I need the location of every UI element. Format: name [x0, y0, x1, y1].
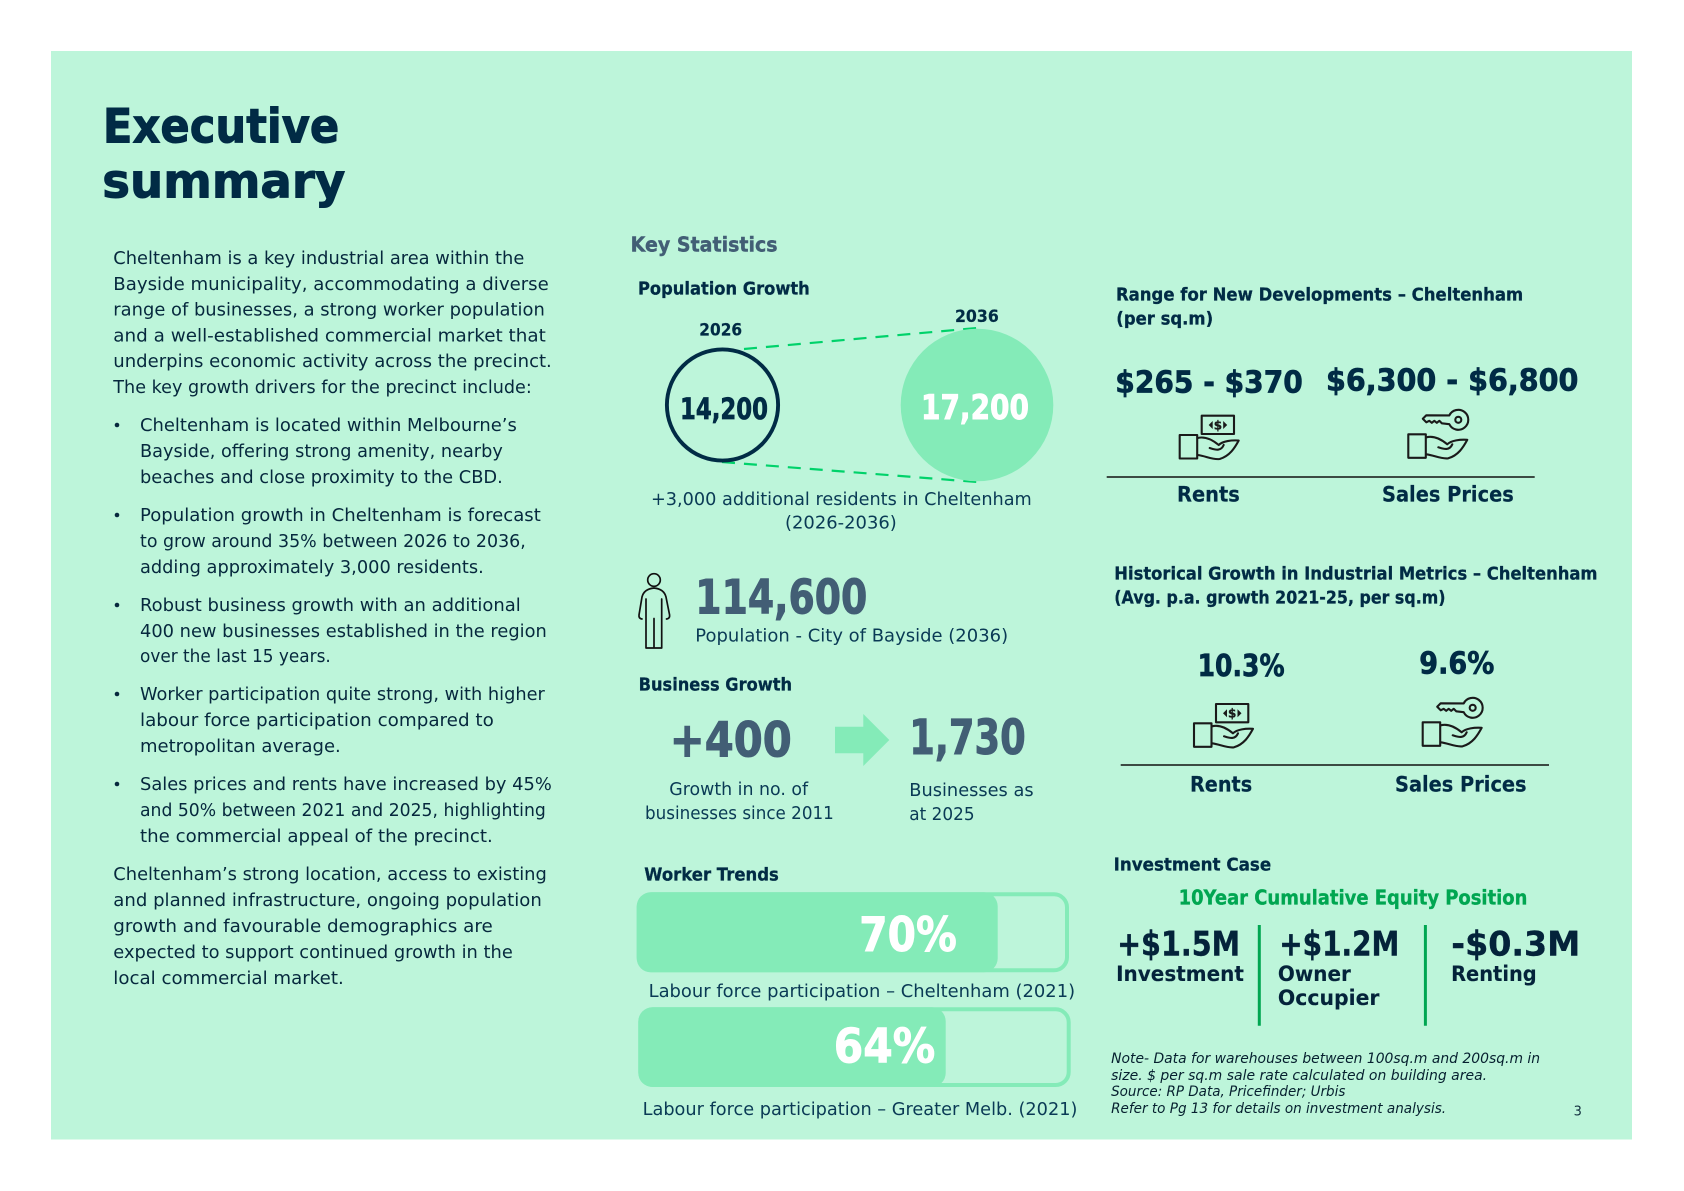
subheading: 10Year Cumulative Equity Position	[1179, 886, 1527, 910]
title	[102, 100, 345, 210]
axis line	[1121, 764, 1549, 766]
intro paragraph: range of businesses, a strong worker population	[113, 300, 545, 320]
closing paragraph	[113, 864, 547, 989]
footnote: Note- Data for warehouses between 100sq.m and 200sq.m in	[1111, 1051, 1540, 1067]
footnote: size. $ per sq.m sale rate calculated on building area.	[1111, 1068, 1487, 1084]
footnote: Refer to Pg 13 for details on investment analysis.	[1111, 1101, 1446, 1117]
icon: hand with money	[1180, 416, 1239, 459]
2036 circle: 2036	[955, 307, 999, 327]
intro paragraph: Cheltenham is a key industrial area within the	[113, 248, 524, 269]
total stat	[909, 710, 1034, 825]
bullet: sales prices and rents: the commercial appeal of the precinct.	[140, 826, 493, 847]
2026 circle: 14,200	[680, 392, 768, 426]
bullet: worker participation: Worker participation quite strong, with higher	[140, 684, 545, 705]
closing paragraph: Cheltenham’s strong location, access to existing	[113, 864, 547, 885]
heading: Range for New Developments – Cheltenham	[1116, 285, 1523, 306]
stat: owner occupier: +$1.2M	[1279, 925, 1399, 965]
bullet: business growth: 400 new businesses established in the region	[140, 621, 547, 642]
closing paragraph: and planned infrastructure, ongoing population	[113, 890, 542, 911]
heading: Worker Trends	[644, 865, 779, 886]
panel: population growth	[638, 279, 1053, 534]
bar: Cheltenham 70%: 70%	[859, 908, 957, 963]
closing paragraph: expected to support continued growth in the	[113, 942, 513, 963]
2036 circle	[901, 307, 1053, 481]
stat: investment: +$1.5M	[1117, 925, 1240, 965]
bullet: population growth: adding approximately 3,000 residents.	[140, 557, 484, 578]
bullet: worker participation: metropolitan average.	[140, 736, 341, 757]
closing paragraph: growth and favourable demographics are	[113, 916, 493, 937]
stat: investment	[1116, 925, 1244, 986]
intro paragraph: The key growth drivers for the precinct include:	[112, 377, 532, 398]
bullet: sales prices and rents: Sales prices and rents have increased by 45%	[140, 774, 552, 795]
growth stat: +400	[670, 712, 792, 768]
heading: (Avg. p.a. growth 2021-25, per sq.m)	[1114, 588, 1445, 609]
population caption	[651, 489, 1032, 534]
icon: hand with money: $	[1214, 418, 1222, 432]
panel: range for new developments	[1107, 285, 1578, 507]
panel: historical growth	[1114, 564, 1598, 797]
growth stat: Growth in no. of	[669, 779, 809, 800]
intro paragraph	[112, 248, 552, 398]
2036 circle: 17,200	[921, 388, 1029, 428]
bullet: population growth: Population growth in Cheltenham is forecast	[140, 505, 541, 526]
bar: Greater Melbourne 64%: Labour force participation – Greater Melb. (2021)	[643, 1099, 1077, 1120]
rents value: $265 - $370	[1115, 365, 1303, 400]
rents label: Rents	[1177, 483, 1240, 507]
sales value: $6,300 - $6,800	[1326, 364, 1578, 399]
sales prices label: Sales Prices	[1395, 773, 1527, 797]
bar: Cheltenham 70%	[637, 892, 1075, 1002]
heading: Investment Case	[1114, 855, 1271, 876]
heading: (per sq.m)	[1116, 309, 1213, 330]
total stat: at 2025	[909, 804, 975, 825]
bullet: sales prices and rents: and 50% between 2021 and 2025, highlighting	[140, 800, 546, 821]
bullet: business growth: Robust business growth with an additional	[140, 595, 521, 616]
bullet: business growth	[115, 595, 547, 667]
panel: investment case	[1114, 855, 1580, 1026]
heading: Business Growth	[639, 675, 792, 696]
panel: narrative text	[112, 248, 552, 989]
panel: worker trends	[637, 865, 1077, 1120]
bullet: location	[115, 415, 517, 488]
bullet: sales prices and rents	[115, 774, 552, 847]
intro paragraph: Bayside municipality, accommodating a diverse	[113, 274, 549, 295]
stat: renting	[1451, 925, 1580, 986]
total stat: 1,730	[909, 710, 1026, 766]
page number: 3	[1574, 1105, 1582, 1120]
bullet: location: Cheltenham is located within Melbourne’s	[140, 415, 517, 436]
bullet: worker participation: labour force participation compared to	[140, 710, 494, 731]
heading: Population Growth	[638, 279, 810, 300]
stat: owner occupier: Occupier	[1278, 986, 1380, 1010]
total stat: Businesses as	[909, 780, 1034, 801]
stat: owner occupier: Owner	[1278, 962, 1352, 986]
panel: bayside population	[639, 570, 1008, 648]
footnote: Source: RP Data, Pricefinder; Urbis	[1111, 1084, 1345, 1100]
bullet: location: beaches and close proximity to the CBD.	[140, 467, 503, 488]
big number: 114,600	[695, 570, 867, 626]
heading	[1116, 285, 1523, 330]
title: summary	[102, 155, 345, 210]
closing paragraph: local commercial market.	[113, 968, 344, 989]
intro paragraph: underpins economic activity across the precinct.	[113, 351, 552, 372]
population caption: +3,000 additional residents in Cheltenham	[651, 489, 1032, 510]
icon: hand with money: $	[1228, 707, 1236, 721]
sales growth value: 9.6%	[1419, 647, 1494, 682]
rents label: Rents	[1190, 773, 1252, 797]
rents growth value: 10.3%	[1198, 649, 1285, 684]
heading	[1114, 564, 1598, 609]
stat: renting: Renting	[1451, 962, 1537, 986]
icon: hand with money	[1194, 704, 1253, 747]
stat: owner occupier	[1278, 925, 1399, 1010]
bullet: population growth	[115, 505, 541, 578]
icon: person	[639, 574, 670, 648]
heading: Historical Growth in Industrial Metrics – Cheltenham	[1114, 564, 1597, 585]
stat: investment: Investment	[1116, 962, 1244, 986]
bullet: location: Bayside, offering strong amenity, nearby	[140, 441, 503, 462]
axis line	[1107, 476, 1535, 478]
2026 circle	[667, 321, 778, 461]
growth stat: businesses since 2011	[645, 803, 834, 824]
population caption: (2026-2036)	[785, 513, 897, 534]
intro paragraph: and a well-established commercial market that	[113, 325, 546, 346]
connector lines	[722, 328, 977, 482]
divider	[1424, 925, 1427, 1026]
divider	[1258, 925, 1261, 1026]
panel: business growth	[639, 675, 1034, 825]
growth stat	[645, 712, 834, 824]
bullet: population growth: to grow around 35% between 2026 to 2036,	[140, 531, 526, 552]
sales prices label: Sales Prices	[1382, 483, 1514, 507]
bar: Greater Melbourne 64%	[638, 1007, 1077, 1120]
bar: Cheltenham 70%: Labour force participation – Cheltenham (2021)	[649, 981, 1075, 1002]
title: Executive	[103, 100, 339, 155]
caption: Population - City of Bayside (2036)	[695, 626, 1008, 646]
heading: key statistics: Key Statistics	[631, 233, 778, 257]
footnote	[1111, 1051, 1540, 1117]
bullet: worker participation	[115, 684, 545, 757]
bar: Greater Melbourne 64%: 64%	[834, 1019, 935, 1074]
arrow	[835, 714, 889, 766]
icon: hand with key	[1423, 698, 1483, 746]
stat: renting: -$0.3M	[1451, 925, 1580, 965]
bullet: business growth: over the last 15 years.	[140, 646, 331, 667]
2026 circle: 2026	[699, 321, 742, 341]
icon: hand with key	[1408, 410, 1468, 458]
